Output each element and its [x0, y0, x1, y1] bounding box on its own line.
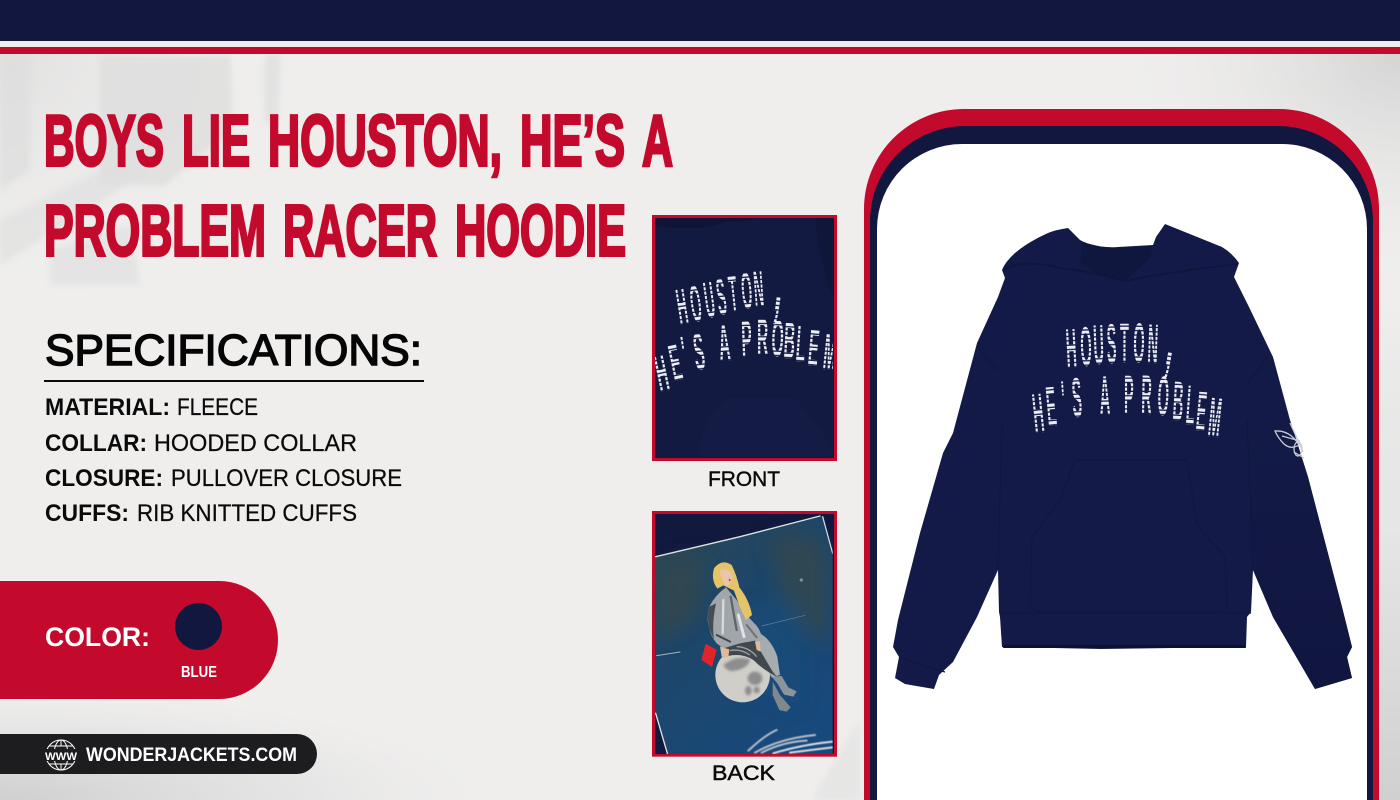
title	[44, 102, 673, 272]
sleeve emblem	[1275, 423, 1304, 458]
hands	[720, 642, 761, 657]
color pill	[0, 581, 278, 699]
main print text: S	[1106, 312, 1117, 375]
spec: material: FLEECE	[177, 394, 258, 421]
hoodie body	[893, 224, 1352, 689]
skirt	[723, 641, 777, 677]
front print text: P	[740, 311, 753, 369]
front print text: N	[752, 261, 766, 319]
spec: collar	[45, 430, 357, 457]
front print text: O	[739, 263, 755, 321]
moon	[715, 655, 770, 702]
main print text: O	[1133, 311, 1145, 375]
website pill	[0, 734, 317, 774]
main print text: S	[1070, 366, 1083, 429]
main print text: '	[1059, 369, 1067, 432]
top navy bar	[0, 0, 1400, 41]
thumbnail: front	[650, 216, 840, 460]
title: RACER	[283, 192, 437, 272]
face	[720, 569, 733, 586]
thumbnail: back	[653, 512, 835, 757]
spec: material	[45, 394, 258, 421]
product frame	[864, 109, 1379, 800]
main print text: R	[1141, 363, 1152, 426]
website address: WONDERJACKETS.COM	[86, 744, 297, 766]
right sleeve shading	[1247, 420, 1352, 689]
hood fold	[1003, 264, 1237, 281]
main print text: H	[1064, 317, 1078, 380]
front print text: R	[757, 309, 768, 367]
seams	[899, 345, 1347, 677]
boots	[772, 676, 797, 697]
back label: BACK	[712, 761, 776, 785]
front print text: M	[821, 323, 840, 382]
main print text	[1030, 286, 1224, 450]
front print text: E	[806, 319, 821, 378]
illustration: woman on moon	[701, 562, 797, 712]
front label: FRONT	[708, 467, 780, 491]
title: BOYS	[44, 102, 164, 182]
specifications list	[45, 394, 402, 527]
spec: material: MATERIAL:	[45, 394, 170, 421]
spec: closure	[45, 465, 402, 492]
front print text: U	[701, 272, 718, 330]
front print text: E	[664, 334, 687, 393]
hair	[713, 562, 752, 620]
flag	[701, 644, 717, 667]
title: HOODIE	[455, 192, 626, 272]
main print text: E	[1194, 380, 1209, 443]
specifications heading: SPECIFICATIONS:	[45, 326, 422, 375]
spec: cuffs: RIB KNITTED CUFFS	[137, 500, 357, 527]
color swatch: blue	[175, 603, 222, 650]
brush strokes	[748, 730, 833, 753]
front print text: O	[687, 276, 705, 334]
spec: cuffs: CUFFS:	[45, 500, 129, 527]
red stripe	[0, 47, 1400, 54]
front print text: '	[678, 326, 691, 384]
legs	[755, 633, 780, 677]
spec: closure: CLOSURE:	[45, 465, 163, 492]
spec: cuffs	[45, 500, 357, 527]
neck opening	[1080, 243, 1153, 281]
hoodie illustration	[893, 224, 1352, 689]
main print text: T	[1120, 311, 1129, 374]
main print text: B	[1171, 369, 1185, 433]
main print text: M	[1206, 386, 1224, 450]
swatch name: BLUE	[181, 664, 217, 681]
front print text: H	[673, 279, 692, 337]
title: HE’S	[520, 102, 625, 182]
title: HOUSTON,	[268, 102, 502, 182]
spec: collar: COLLAR:	[45, 430, 147, 457]
main print text: P	[1124, 363, 1134, 426]
front print text: S	[713, 269, 729, 327]
spec: closure: PULLOVER CLOSURE	[171, 465, 402, 492]
main print text: H	[1030, 382, 1047, 445]
jacket	[708, 587, 763, 648]
main print text: ,	[1160, 286, 1185, 386]
front print text: H	[650, 345, 674, 404]
color label: COLOR:	[45, 622, 150, 652]
panel edges	[656, 516, 833, 753]
front print text	[655, 271, 833, 392]
printed panel	[655, 516, 833, 757]
title: A	[642, 102, 673, 182]
icon: globe: WWW	[45, 751, 78, 763]
title: LIE	[182, 102, 250, 182]
icon: globe	[45, 740, 78, 770]
title: PROBLEM	[44, 192, 266, 272]
main print text: N	[1147, 312, 1159, 376]
front print text: T	[726, 266, 740, 324]
main print text: O	[1157, 364, 1170, 428]
main print text: U	[1092, 313, 1105, 376]
front print text: ,	[770, 231, 792, 331]
front print text: L	[794, 315, 808, 374]
main print text: A	[1099, 364, 1111, 427]
front print text: A	[717, 314, 732, 373]
front print text: B	[782, 312, 797, 371]
main print text: O	[1079, 315, 1093, 378]
front print text: O	[771, 310, 785, 369]
main print text: L	[1184, 373, 1197, 437]
spec: collar: HOODED COLLAR	[154, 430, 357, 457]
front print text: S	[690, 323, 708, 382]
main print text: E	[1044, 375, 1059, 438]
